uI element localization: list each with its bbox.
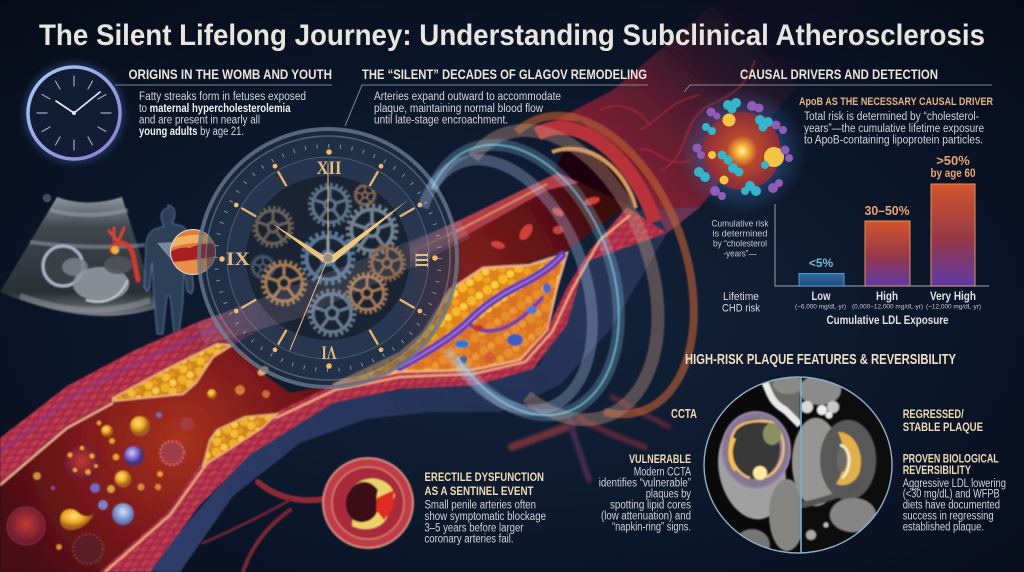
right half: regressed plaque [791, 378, 878, 542]
panel: vulnerable plaque text: identifies “vulnerable” [599, 478, 691, 490]
icon: small glowing clock [24, 63, 124, 163]
bar: very high [931, 184, 975, 286]
translucent artery passing through clock [197, 220, 470, 345]
branches from artery at lower right [512, 397, 669, 480]
plaque: purple necrotic stripe [400, 255, 562, 367]
bar chart: lifetime CHD risk by cumulative LDL exposure: Lifetime [723, 291, 759, 303]
roman numerals: XII [316, 158, 342, 179]
plaque: orange lower zone [405, 262, 560, 369]
panel: origins in the womb and youth: Fatty streaks form in fetuses exposed [139, 91, 306, 103]
panel: causal drivers and detection: to ApoB-containing lipoprotein particles. [804, 134, 983, 146]
CCTA label: CCTA [671, 407, 697, 421]
panel: regressed plaque and reversibility text: success in regressing [903, 511, 994, 523]
red blood cells [490, 195, 601, 250]
panel: erectile dysfunction as a sentinel event: 3–5 years before larger [424, 523, 524, 535]
icon: fetal ultrasound [0, 195, 157, 316]
clock with gears: VI [322, 342, 336, 362]
bar chart: lifetime CHD risk by cumulative LDL exposure [712, 153, 989, 327]
bar chart: lifetime CHD risk by cumulative LDL exposure: (~6,000 mg/dL·yr) [795, 304, 846, 310]
panel: silent decades of Glagov remodeling: until late-stage encroachment. [374, 114, 508, 126]
lower artery wall [100, 207, 667, 572]
panel: erectile dysfunction as a sentinel event: show symptomatic blockage [424, 511, 546, 523]
panel: vulnerable plaque text: “napkin-ring” signs. [612, 521, 691, 533]
artery: remodeled section [333, 128, 655, 385]
bar chart: lifetime CHD risk by cumulative LDL exposure: (0,000–12,000 mg/dL·yr) [852, 304, 923, 310]
panel: regressed plaque and reversibility text [903, 407, 1006, 534]
panel: causal drivers and detection: years”—the cumulative lifetime exposure [804, 123, 984, 135]
CT scan comparison circle [704, 374, 892, 561]
panel: origins in the womb and youth: to maternal hypercholesterolemia [139, 103, 291, 115]
panel: vulnerable plaque text: spotting lipid cores [610, 500, 691, 512]
clock with gears: III [410, 252, 432, 268]
bar: high [865, 221, 910, 286]
panel: vulnerable plaque text [599, 452, 691, 533]
icon: fetal aorta [109, 228, 138, 280]
chart side note: Cumulative risk [712, 218, 769, 228]
branches to small artery [203, 482, 325, 572]
small penile artery cross-section [323, 458, 413, 548]
bar chart: lifetime CHD risk by cumulative LDL exposure: Very High [930, 291, 976, 303]
panel: vulnerable plaque text: Modern CCTA [634, 467, 691, 479]
bar chart: lifetime CHD risk by cumulative LDL exposure: Cumulative LDL Exposure [826, 315, 948, 327]
chart side note [712, 218, 769, 258]
bar chart: lifetime CHD risk by cumulative LDL exposure: <5% [809, 256, 834, 270]
artery: early streak section [0, 207, 667, 572]
bar chart: lifetime CHD risk by cumulative LDL exposure: High [876, 291, 898, 303]
panel: silent decades of Glagov remodeling: THE “SILENT” DECADES OF GLAGOV REMODELING [362, 66, 647, 82]
artery opening rim [555, 146, 630, 205]
bar chart: lifetime CHD risk by cumulative LDL exposure: >50% [936, 153, 970, 168]
upper artery wall [0, 300, 276, 487]
icon: human silhouette with artery inset [144, 205, 216, 334]
panel: regressed plaque and reversibility text: REGRESSED/ [903, 407, 964, 421]
clock with gears [199, 129, 457, 387]
bar: low [799, 274, 844, 286]
panel: silent decades of Glagov remodeling [345, 66, 648, 126]
panel: origins in the womb and youth: and are present in nearly all [139, 114, 260, 126]
panel: vulnerable plaque text: VULNERABLE [629, 452, 691, 466]
yellow lipid spots [708, 114, 784, 184]
panel: erectile dysfunction as a sentinel event [424, 470, 546, 546]
panel: causal drivers and detection: Total risk is determined by “cholesterol- [804, 111, 979, 123]
panel: regressed plaque and reversibility text: established plaque. [903, 522, 984, 534]
clock hands [270, 163, 408, 350]
panel: erectile dysfunction as a sentinel event: AS A SENTINEL EVENT [424, 484, 534, 498]
panel: erectile dysfunction as a sentinel event: coronary arteries fail. [424, 534, 514, 546]
left half: vulnerable plaque [717, 378, 800, 552]
panel: vulnerable plaque text: plaques by [646, 489, 691, 501]
chart side note: is determined [712, 228, 768, 238]
Glagov remodeling rings [385, 87, 732, 448]
plaque: growing fatty streak [203, 414, 277, 466]
plaque: lipid core [333, 253, 567, 385]
panel: origins in the womb and youth [115, 66, 332, 138]
plaque: early fatty streak [113, 344, 232, 401]
panel: regressed plaque and reversibility text: diets have documented [903, 500, 1000, 512]
clock with gears: IX [226, 249, 250, 270]
panel: regressed plaque and reversibility text: REVERSIBILITY [903, 463, 971, 477]
title: The Silent Lifelong Journey: Understanding Subclinical Atherosclerosis [39, 19, 985, 52]
panel: silent decades of Glagov remodeling: plaque, maintaining normal blood flow [374, 103, 544, 115]
bar chart: lifetime CHD risk by cumulative LDL exposure: 30–50% [864, 203, 910, 218]
panel: erectile dysfunction as a sentinel event: Small penile arteries often [424, 500, 536, 512]
blue outer sheath of artery [145, 207, 700, 572]
faint artery tube at upper right [540, 0, 865, 233]
bar chart: lifetime CHD risk by cumulative LDL exposure: Low [812, 291, 831, 303]
panel: silent decades of Glagov remodeling: Arteries expand outward to accommodate [374, 91, 561, 103]
far lumen [407, 182, 626, 340]
panel: causal drivers and detection [684, 66, 993, 146]
heading: high-risk plaque features: HIGH-RISK PLAQUE FEATURES & REVERSIBILITY [685, 352, 956, 368]
panel: origins in the womb and youth: ORIGINS IN THE WOMB AND YOUTH [128, 66, 332, 82]
gear mechanism [251, 184, 405, 335]
teal apolipoprotein clusters [694, 98, 773, 196]
chart side note: by “cholesterol [713, 238, 767, 248]
hour markers [242, 172, 414, 344]
panel: regressed plaque and reversibility text: STABLE PLAQUE [903, 420, 983, 434]
upper wall [405, 165, 590, 262]
panel: vulnerable plaque text: (low attenuation) and [601, 510, 691, 522]
bar chart: lifetime CHD risk by cumulative LDL exposure: CHD risk [722, 302, 760, 314]
panel: causal drivers and detection: CAUSAL DRIVERS AND DETECTION [740, 66, 938, 82]
lumen [0, 345, 333, 572]
panel: regressed plaque and reversibility text: (<30 mg/dL) and WFPB [903, 489, 1000, 501]
panel: origins in the womb and youth: young adults by age 21. [139, 126, 244, 138]
bar chart: lifetime CHD risk by cumulative LDL exposure: by age 60 [930, 168, 976, 180]
ApoB lipoprotein particle [678, 87, 806, 215]
chart side note: -years”— [724, 248, 757, 258]
purple apolipoprotein clusters [692, 101, 793, 200]
panel: erectile dysfunction as a sentinel event: ERECTILE DYSFUNCTION [424, 470, 544, 484]
lipid and immune particles in lumen [7, 364, 270, 564]
bar chart: lifetime CHD risk by cumulative LDL exposure: (~12,000 mg/dL·yr) [926, 304, 981, 310]
